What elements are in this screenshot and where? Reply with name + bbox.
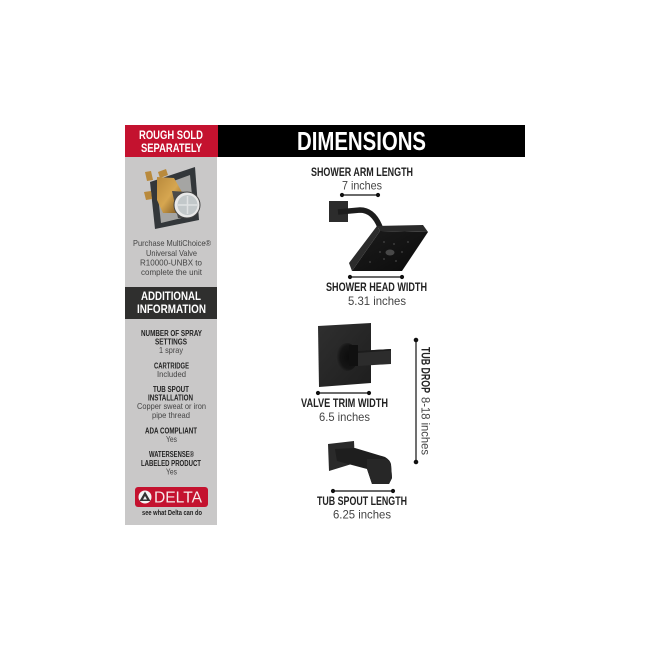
label: tub drop: 8-18 inches xyxy=(418,397,432,455)
icon: tub spout xyxy=(328,441,392,484)
label: tub spout length xyxy=(317,496,407,522)
text: purchase note xyxy=(133,238,212,277)
label: shower arm length xyxy=(311,167,413,192)
label: shower head width xyxy=(326,282,427,308)
spec: ada compliant xyxy=(145,426,197,444)
text: purchase note: complete the unit xyxy=(141,267,203,277)
spec: watersense labeled product: WATERSENSE® xyxy=(149,450,194,459)
spec: tub spout installation: pipe thread xyxy=(152,410,190,420)
banner: rough sold separately: ROUGH SOLD xyxy=(139,128,203,142)
banner: rough sold separately: SEPARATELY xyxy=(141,141,202,155)
spec: tub spout installation: TUB SPOUT xyxy=(153,385,189,394)
spec: cartridge: Included xyxy=(157,369,186,379)
arrow: tub spout dimension line xyxy=(331,489,395,493)
text: purchase note: Purchase MultiChoice® xyxy=(133,238,212,248)
banner: additional information: ADDITIONAL xyxy=(141,289,201,303)
spec: number of spray settings: SETTINGS xyxy=(155,338,188,346)
arrow: valve trim dimension line xyxy=(316,391,371,395)
spec: cartridge: CARTRIDGE xyxy=(154,362,189,370)
spec: ada compliant: Yes xyxy=(166,434,177,444)
label: valve trim width: 6.5 inches xyxy=(319,410,370,424)
label: shower head width: 5.31 inches xyxy=(348,294,406,308)
arrow: shower head dimension line xyxy=(348,275,404,279)
spec: tub spout installation: INSTALLATION xyxy=(148,394,193,402)
label: tub drop xyxy=(418,347,432,455)
spec: watersense labeled product: Yes xyxy=(166,466,177,476)
label: shower arm length: 7 inches xyxy=(342,178,382,192)
spec: tub spout installation: Copper sweat or iron xyxy=(137,401,206,411)
spec: watersense labeled product: LABELED PRODUCT xyxy=(141,459,201,468)
label: tub spout length: 6.25 inches xyxy=(333,508,391,522)
spec: ada compliant: ADA COMPLIANT xyxy=(145,426,197,436)
logo: delta xyxy=(135,487,208,507)
panel: left sidebar xyxy=(125,125,218,525)
label: shower arm length: SHOWER ARM LENGTH xyxy=(311,167,413,179)
spec: number of spray settings: NUMBER OF SPRAY xyxy=(141,329,203,338)
logo: delta: DELTA xyxy=(154,490,203,506)
banner: additional information: INFORMATION xyxy=(137,302,206,316)
banner: additional information xyxy=(125,287,217,319)
arrow: tub drop dimension line xyxy=(414,338,418,464)
title bar: dimensions xyxy=(218,125,525,157)
text: purchase note: Universal Valve xyxy=(146,248,197,258)
text: tagline: see what Delta can do xyxy=(142,510,202,517)
label: tub drop: TUB DROP xyxy=(418,347,430,393)
text: purchase note: R10000-UNBX to xyxy=(140,258,202,268)
spec: watersense labeled product xyxy=(141,450,201,476)
label: shower head width: SHOWER HEAD WIDTH xyxy=(326,282,427,294)
spec: number of spray settings xyxy=(141,329,203,355)
icon: valve trim xyxy=(318,323,391,387)
label: valve trim width xyxy=(301,398,388,424)
label: tub spout length: TUB SPOUT LENGTH xyxy=(317,496,407,508)
arrow: shower arm dimension line xyxy=(340,193,380,197)
icon: rough-in valve xyxy=(144,167,200,229)
spec: cartridge xyxy=(154,362,189,379)
icon: shower arm and head xyxy=(329,201,428,271)
banner: rough sold separately xyxy=(125,125,218,157)
title bar: dimensions: DIMENSIONS xyxy=(297,128,426,156)
spec: number of spray settings: 1 spray xyxy=(159,345,184,355)
spec: tub spout installation xyxy=(137,385,206,420)
label: valve trim width: VALVE TRIM WIDTH xyxy=(301,398,388,410)
